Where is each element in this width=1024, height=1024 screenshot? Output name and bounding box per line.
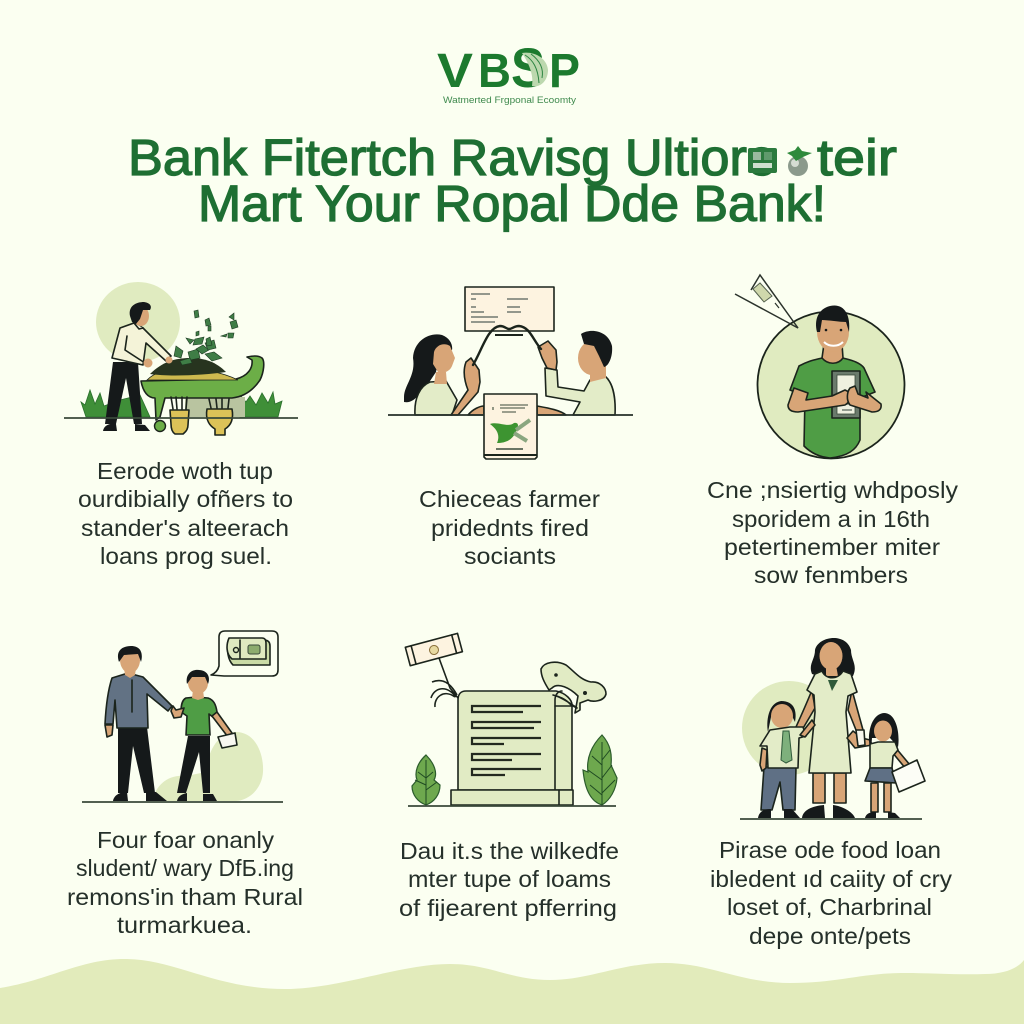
title: teir [817, 129, 897, 186]
caption 2: pridednts fired [431, 515, 589, 541]
bottom wave band [0, 959, 1024, 1024]
panel: farmer with grain dinosaur [64, 282, 298, 569]
icon: consultation across a desk [388, 287, 633, 459]
caption 5: mter tupe of loams [408, 866, 611, 892]
caption 6: depe onte/pets [749, 923, 911, 949]
panel: man with a document in a circle [707, 275, 958, 588]
title: Bank Fitertch Ravisg Ultiore [128, 129, 776, 186]
icon: man holding a booklet [735, 275, 904, 458]
caption 1 [78, 458, 293, 569]
icon: farmer and harvest [64, 282, 298, 435]
caption 5 [399, 838, 619, 921]
caption 5: of fijearent pfferring [399, 895, 617, 921]
caption 4: sludent/ wary DfБ.ing [76, 855, 294, 881]
title: Mart Your Ropal Dde Bank! [198, 175, 826, 232]
caption 3 [707, 477, 958, 588]
logo: V [437, 45, 473, 98]
caption 1: stander's alteerach [81, 515, 289, 541]
caption 4: remons'in tham Rural [67, 884, 303, 910]
icon: family [740, 638, 925, 819]
caption 4: Four foar onanly [97, 827, 274, 853]
logo: P [549, 45, 580, 98]
logo: B [478, 45, 511, 98]
logo: Watmerted Frgponal Ecoomty [443, 95, 576, 106]
panel: loan document [399, 633, 619, 921]
icon: man and boy with money speech bubble [82, 631, 283, 802]
logo: S [511, 36, 545, 99]
caption 1: loans prog suel. [100, 543, 272, 569]
caption 2: Chieceas farmer [419, 486, 600, 512]
caption 4 [67, 827, 303, 938]
caption 6: ibledent ıd caiity of cry [710, 866, 952, 892]
caption 3: sow fenmbers [754, 562, 908, 588]
caption 2 [419, 486, 600, 569]
logo [437, 36, 580, 106]
title [128, 129, 897, 232]
caption 4: turmarkuea. [117, 912, 252, 938]
caption 6: Pirase ode food loan [719, 837, 941, 863]
panel: mother and children [710, 638, 952, 949]
caption 3: Cne ;nsiertig whdposly [707, 477, 958, 503]
panel: two people reviewing a document [388, 287, 633, 569]
caption 3: petertinember miter [724, 534, 940, 560]
caption 5: Dau it.s the wilkedfe [400, 838, 619, 864]
caption 2: sociants [464, 543, 556, 569]
caption 6 [710, 837, 952, 949]
panel: adult and student [67, 631, 303, 938]
caption 6: loset of, Charbrinal [727, 894, 932, 920]
caption 1: ourdibially ofñers to [78, 486, 293, 512]
caption 1: Eerode woth tup [97, 458, 273, 484]
icon: document with flag and plants [405, 633, 617, 806]
caption 3: sporidem a in 16th [732, 506, 930, 532]
